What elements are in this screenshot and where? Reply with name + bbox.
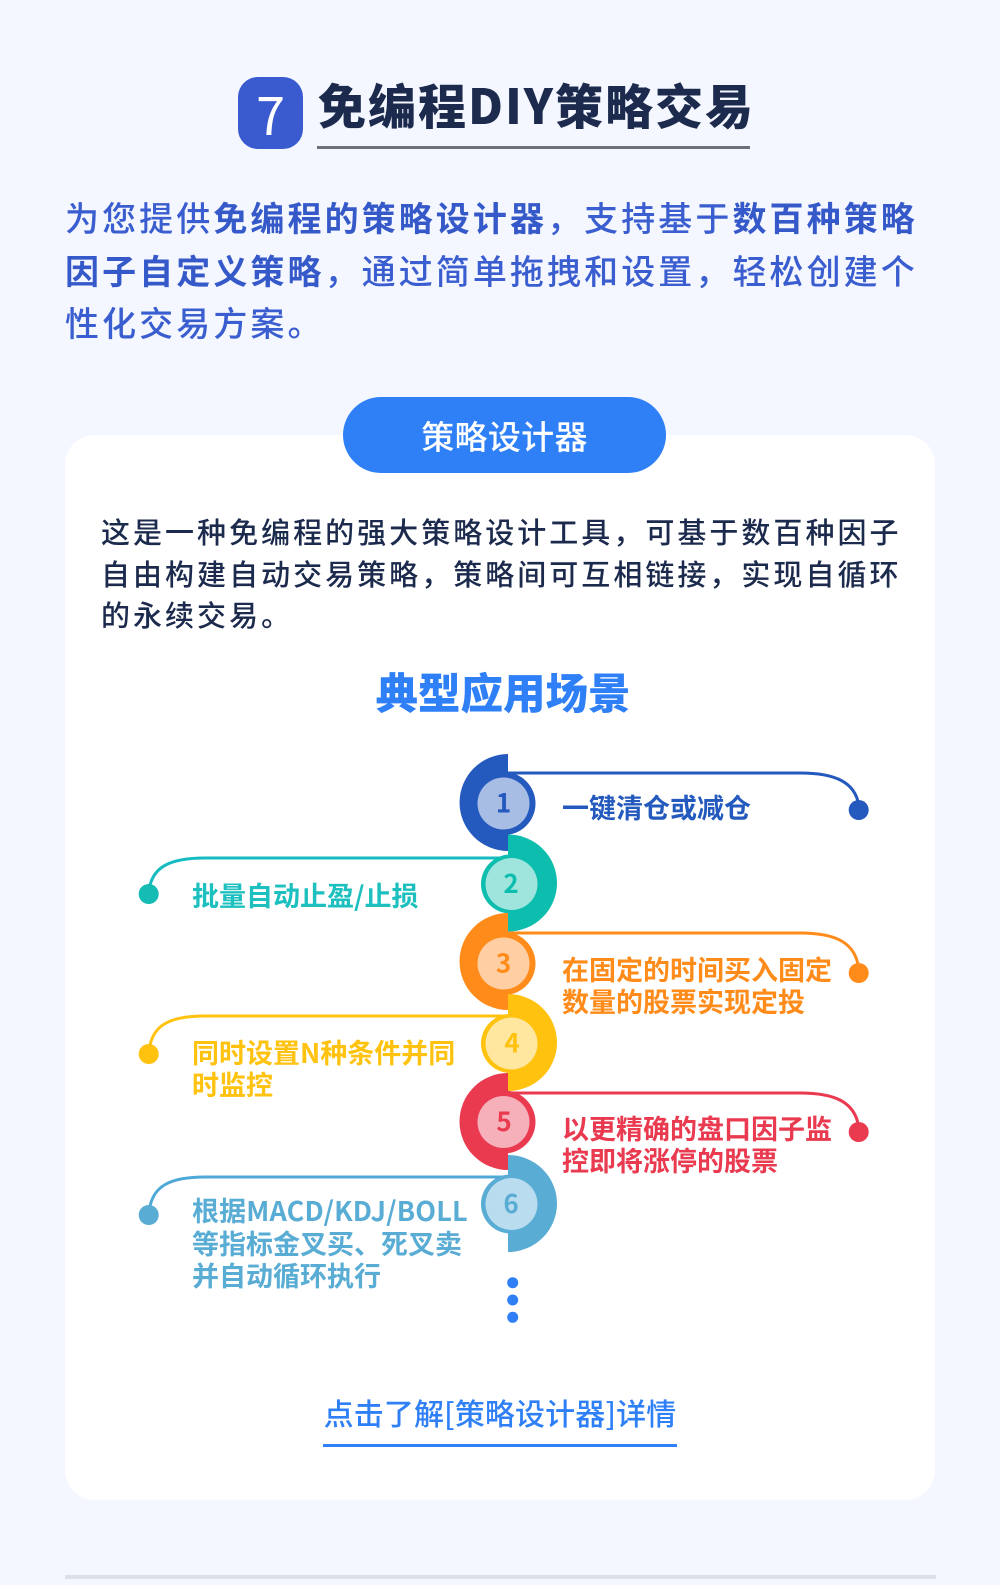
continuation dots	[507, 1277, 518, 1323]
step 5: 以更精确的盘口因子监	[562, 1108, 832, 1147]
link underline	[323, 1444, 677, 1447]
step 1	[460, 754, 869, 851]
step 3	[460, 913, 869, 1020]
step 5: 控即将涨停的股票	[562, 1140, 778, 1179]
pill heading: 策略设计器	[421, 411, 588, 459]
step 6: 并自动循环执行	[192, 1255, 381, 1294]
description text	[101, 510, 902, 635]
intro text: 因子自定义策略，通过简单拖拽和设置，轻松创建个	[65, 245, 918, 294]
description text: 这是一种免编程的强大策略设计工具，可基于数百种因子	[101, 510, 902, 552]
step 6: 6	[503, 1184, 519, 1221]
step 6: 根据MACD/KDJ/BOLL	[192, 1190, 468, 1229]
description text: 的永续交易。	[101, 593, 293, 635]
step 5: 5	[496, 1102, 512, 1139]
step 4: 时监控	[192, 1064, 273, 1103]
chart heading: 典型应用场景	[375, 661, 630, 722]
step 5	[460, 1073, 869, 1179]
intro text	[65, 192, 918, 346]
pill heading	[343, 397, 666, 473]
number badge	[238, 77, 303, 149]
intro text: 性化交易方案。	[65, 297, 325, 346]
step 3: 3	[496, 944, 511, 980]
number badge: 7	[256, 75, 285, 150]
step 6	[139, 1155, 557, 1294]
step 2: 批量自动止盈/止损	[192, 875, 418, 914]
step 3: 在固定的时间买入固定	[562, 949, 832, 988]
bottom divider	[65, 1575, 936, 1579]
step 6: 等指标金叉买、死叉卖	[192, 1223, 462, 1262]
section header	[238, 68, 755, 150]
step 2: 2	[503, 864, 519, 901]
step 2	[139, 834, 557, 932]
step 4	[139, 994, 557, 1103]
description text: 自由构建自动交易策略，策略间可互相链接，实现自循环	[101, 552, 902, 594]
step 3: 数量的股票实现定投	[562, 981, 805, 1020]
step 4: 4	[504, 1024, 520, 1060]
intro text: 为您提供免编程的策略设计器，支持基于数百种策略	[65, 192, 918, 241]
title underline	[317, 146, 750, 149]
step 1: 一键清仓或减仓	[562, 787, 751, 826]
title: 免编程DIY策略交易	[318, 68, 755, 138]
step 1: 1	[496, 784, 511, 820]
details link: 点击了解[策略设计器]详情	[324, 1390, 676, 1434]
panel: strategy designer	[65, 435, 935, 1500]
step 4: 同时设置N种条件并同	[192, 1032, 455, 1071]
